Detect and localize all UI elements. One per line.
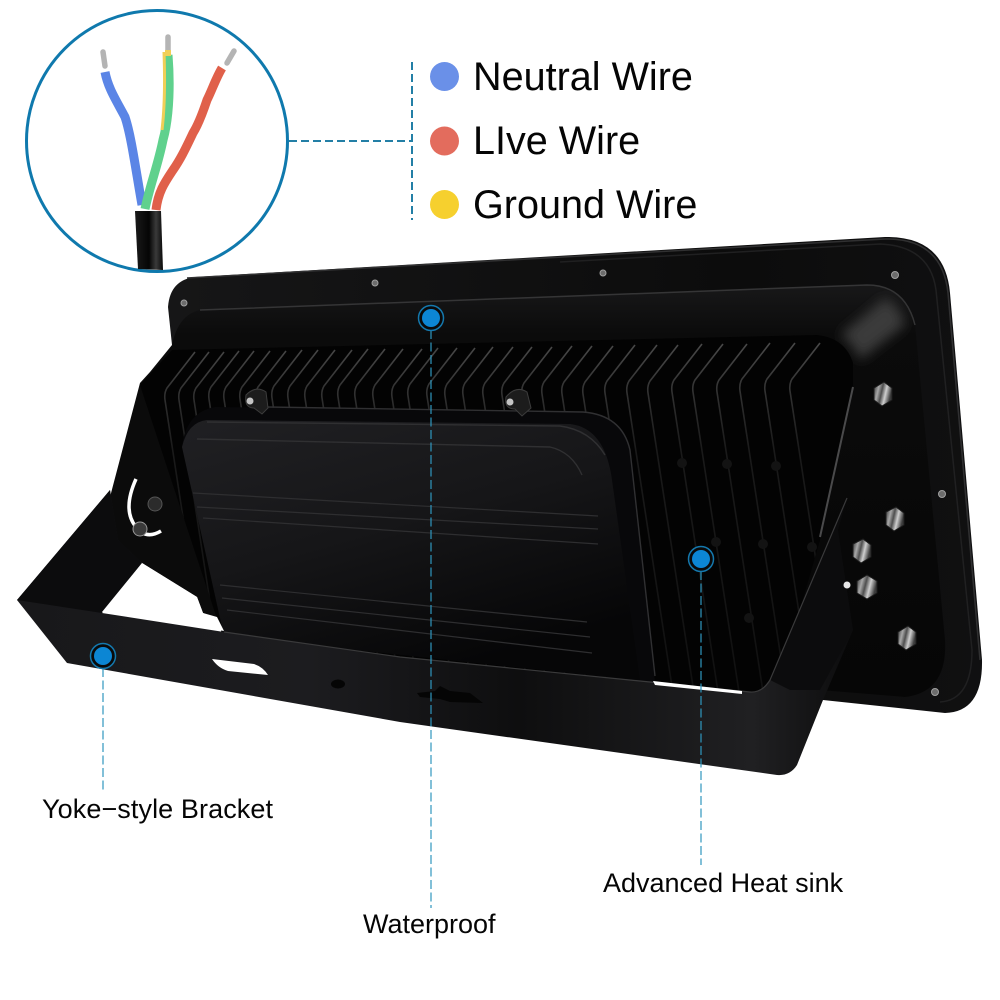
icon: blue neutral wire — [105, 72, 142, 205]
rear housing — [172, 285, 945, 697]
bracket inner edge highlight — [224, 498, 847, 692]
connector: dashed lines from circle to legend — [289, 62, 412, 220]
callout line — [102, 668, 104, 790]
callout: heat sink — [603, 546, 844, 898]
heat sink base — [140, 335, 853, 695]
yoke bracket — [17, 490, 853, 775]
pivot bolts — [133, 497, 162, 536]
legend item: live wire: LIve Wire — [473, 119, 640, 163]
thumb screws — [246, 389, 531, 416]
icon: bare conductor tips — [103, 37, 234, 66]
housing edge highlight — [200, 285, 915, 325]
driver box face — [182, 420, 640, 680]
icon: black cable sleeve — [135, 211, 163, 270]
callout: bracket — [42, 644, 273, 824]
heat sink fins — [165, 343, 836, 700]
side pivot slot — [129, 479, 161, 535]
callout label: Advanced Heat sink — [603, 868, 844, 898]
callout label: Yoke−style Bracket — [42, 794, 273, 824]
bracket left arm inner face — [17, 490, 142, 613]
driver box rear plate — [182, 407, 655, 682]
frame inner line — [560, 244, 972, 702]
bolt glint — [844, 582, 850, 588]
callout marker — [90, 644, 116, 668]
callout line — [430, 330, 432, 908]
legend: wire colours — [430, 55, 697, 227]
callout line — [700, 571, 702, 865]
callout marker — [688, 546, 714, 572]
icon: green and yellow ground wire — [145, 50, 169, 209]
legend item: ground wire: Ground Wire — [473, 183, 697, 227]
front frame of the lamp — [168, 237, 982, 713]
callout: waterproof — [363, 306, 496, 939]
gap between bracket and housing — [102, 563, 224, 631]
callout marker — [418, 306, 444, 330]
left mounting side — [110, 345, 260, 625]
product: flood light — [17, 237, 982, 775]
circle outline — [26, 10, 288, 272]
driver box ridges — [193, 493, 598, 653]
bracket right arm inner face — [770, 498, 853, 690]
light gap under heat sink — [653, 681, 742, 694]
callout label: Waterproof — [363, 909, 496, 939]
bracket slot — [212, 659, 268, 675]
hex bolts — [853, 382, 916, 650]
icon: red live wire — [156, 68, 222, 210]
panel: wire detail circle — [26, 10, 288, 272]
bracket mounting holes — [331, 680, 483, 703]
driver box edge lines — [197, 407, 655, 676]
frame rim highlight — [187, 239, 980, 660]
housing corner reflection — [840, 298, 905, 360]
heat sink dimples — [677, 458, 817, 623]
frame screws — [181, 270, 946, 696]
bracket plate line — [820, 387, 853, 537]
legend item: neutral wire: Neutral Wire — [473, 55, 693, 99]
